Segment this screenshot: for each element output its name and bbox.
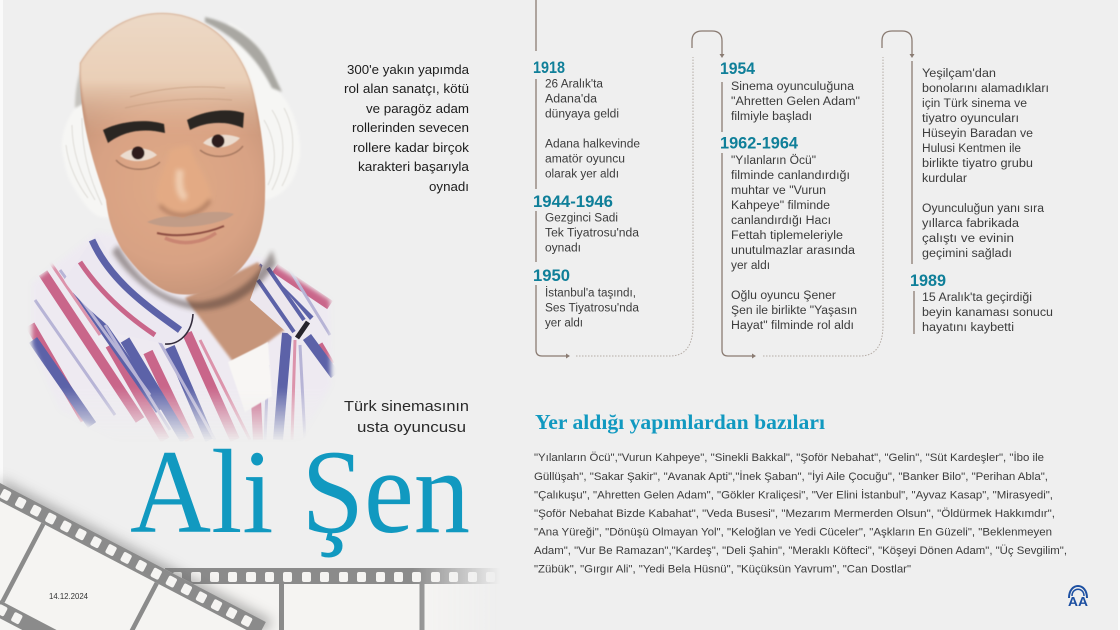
1950: Ses Tiyatrosu'nda: [545, 302, 640, 314]
timeline column 2: [720, 31, 914, 358]
1954: [720, 60, 860, 123]
1962-1964: [720, 134, 857, 332]
intro text: ve paragöz adam: [366, 101, 469, 116]
theatre group text: [922, 68, 1049, 260]
icon: AA logo: [1068, 586, 1089, 609]
1962-1964: filminde canlandırdığı: [731, 170, 850, 182]
1944-1946: Gezginci Sadi: [545, 212, 618, 224]
1944-1946: Tek Tiyatrosu'nda: [545, 228, 640, 240]
1954: "Ahretten Gelen Adam": [731, 96, 860, 108]
1989: hayatını kaybetti: [922, 322, 1014, 334]
filmography list: Adam", "Vur Be Ramazan","Kardeş", "Deli Şahin", "Meraklı Köfteci", "Köşeyi Dönen Adam", "Üç Sevgilim",: [534, 545, 1067, 557]
timeline column 1: [533, 0, 724, 358]
filmography list: "Şoför Nebahat Bizde Kabahat", "Veda Busesi", "Mezarım Mermerden Olsun", "Öldürmek Hakkımdır",: [534, 508, 1055, 520]
theatre group text: yıllarca fabrikada: [922, 218, 1020, 230]
1918: olarak yer aldı: [545, 168, 619, 180]
intro text: [344, 62, 470, 194]
1962-1964: Oğlu oyuncu Şener: [731, 290, 836, 302]
filmography list: "Çalıkuşu", "Ahretten Gelen Adam", "Gökler Kraliçesi", "Ver Elini İstanbul", "Ayvaz Kasap", "Mirasyedi",: [534, 488, 1053, 502]
1944-1946: [533, 193, 640, 254]
moustache and mouth: [147, 212, 234, 243]
filmography list: [534, 451, 1067, 576]
intro text: 300'e yakın yapımda: [347, 62, 470, 77]
1989: 1989: [910, 272, 946, 290]
theatre group text: tiyatro oyuncuları: [922, 113, 1019, 125]
title: Ali Şen: [130, 425, 470, 558]
subtitle: usta oyuncusu: [357, 419, 466, 436]
forehead: [80, 13, 259, 140]
left collar: [64, 276, 186, 344]
1918: 26 Aralık'ta: [545, 78, 604, 90]
1918: amatör oyuncu: [545, 154, 625, 166]
white hair: [62, 17, 300, 218]
1950: [533, 267, 640, 330]
1962-1964: Hayat" filminde rol aldı: [731, 320, 854, 332]
1950: 1950: [533, 267, 570, 285]
eyebrows: [103, 110, 244, 143]
1954: 1954: [720, 60, 756, 78]
undershirt: [228, 342, 272, 412]
date: 14.12.2024: [49, 592, 89, 601]
1962-1964: "Yılanların Öcü": [731, 155, 816, 167]
1918: [533, 59, 640, 180]
theatre group text: Hüseyin Baradan ve: [922, 128, 1033, 140]
1962-1964: muhtar ve "Vurun: [731, 185, 826, 197]
intro text: rollerinden sevecen: [352, 120, 469, 135]
1962-1964: Fettah tiplemeleriyle: [731, 230, 843, 242]
theatre group text: bonolarını alamadıkları: [922, 83, 1049, 95]
1950: İstanbul'a taşındı,: [545, 286, 636, 300]
theatre group text: çalıştı ve evinin: [922, 233, 1014, 245]
theatre group text: Hulusi Kentmen ile: [922, 143, 1021, 155]
diagonal film strip: [0, 478, 272, 630]
timeline line and connector: [536, 0, 724, 358]
1962-1964: 1962-1964: [720, 134, 799, 152]
face: [80, 13, 265, 295]
1989: [910, 272, 1053, 334]
theatre group text: geçimini sağladı: [922, 248, 1012, 260]
theatre group text: için Türk sinema ve: [922, 98, 1027, 110]
forehead wrinkles: [125, 87, 232, 108]
theatre group text: kurdular: [922, 173, 967, 185]
1954: filmiyle başladı: [731, 111, 812, 123]
1962-1964: Kahpeye" filminde: [731, 200, 830, 212]
1918: dünyaya geldi: [545, 108, 619, 120]
filmography heading: Yer aldığı yapımlardan bazıları: [535, 410, 825, 434]
intro text: oynadı: [429, 179, 469, 194]
filmography list: "Ana Yüreği", "Dönüşü Olmayan Yol", "Keloğlan ve Yedi Cüceler", "Aşkların En Güzeli", "Beklenmeyen: [534, 526, 1052, 538]
1989: 15 Aralık'ta geçirdiği: [922, 292, 1032, 304]
1918: Adana halkevinde: [545, 138, 640, 150]
1962-1964: Şen ile birlikte "Yaşasın: [731, 305, 857, 317]
1918: 1918: [533, 59, 565, 77]
1962-1964: unutulmazlar arasında: [731, 245, 856, 257]
1918: Adana'da: [545, 94, 598, 106]
icon: AA logo: AA: [1068, 594, 1089, 609]
subtitle: Türk sinemasının: [344, 398, 469, 415]
nose: [157, 145, 211, 215]
filmography list: "Zübük", "Gırgır Ali", "Yedi Bela Hüsnü", "Küçüksün Yavrum", "Can Dostlar": [534, 564, 911, 576]
timeline column 3: [910, 61, 1053, 334]
right collar: [250, 264, 310, 338]
intro text: rol alan sanatçı, kötü: [344, 81, 469, 96]
theatre group text: Oyunculuğun yanı sıra: [922, 203, 1045, 215]
theatre group text: Yeşilçam'dan: [922, 68, 996, 80]
1944-1946: oynadı: [545, 242, 581, 254]
eyes: [116, 134, 243, 169]
horizontal film strip: [165, 568, 500, 630]
1950: yer aldı: [545, 318, 583, 330]
filmography list: Güllüşah", "Sakar Şakir", "Avanak Apti","İnek Şaban", "İyi Aile Çocuğu", "Banker Bilo", "Perihan Abla",: [534, 470, 1048, 483]
1989: beyin kanaması sonucu: [922, 307, 1053, 319]
theatre group text: birlikte tiyatro grubu: [922, 158, 1033, 170]
shirt: [28, 238, 334, 439]
intro text: rollere kadar birçok: [353, 140, 470, 155]
shadow under jaw: [112, 245, 276, 310]
1962-1964: canlandırdığı Hacı: [731, 215, 831, 227]
timeline line and connector: [722, 31, 914, 358]
1944-1946: 1944-1946: [533, 193, 613, 211]
neck: [184, 261, 286, 361]
timeline lines: [912, 61, 914, 334]
1962-1964: yer aldı: [731, 260, 770, 272]
intro text: karakteri başarıyla: [358, 159, 470, 174]
filmography list: "Yılanların Öcü","Vurun Kahpeye", "Sinekli Bakkal", "Şoför Nebahat", "Gelin", "Süt Kardeşler", "İbo ile: [534, 451, 1044, 464]
1954: Sinema oyunculuğuna: [731, 81, 855, 93]
subtitle: [344, 398, 469, 436]
portrait photo of Ali Şen: [20, 13, 340, 450]
